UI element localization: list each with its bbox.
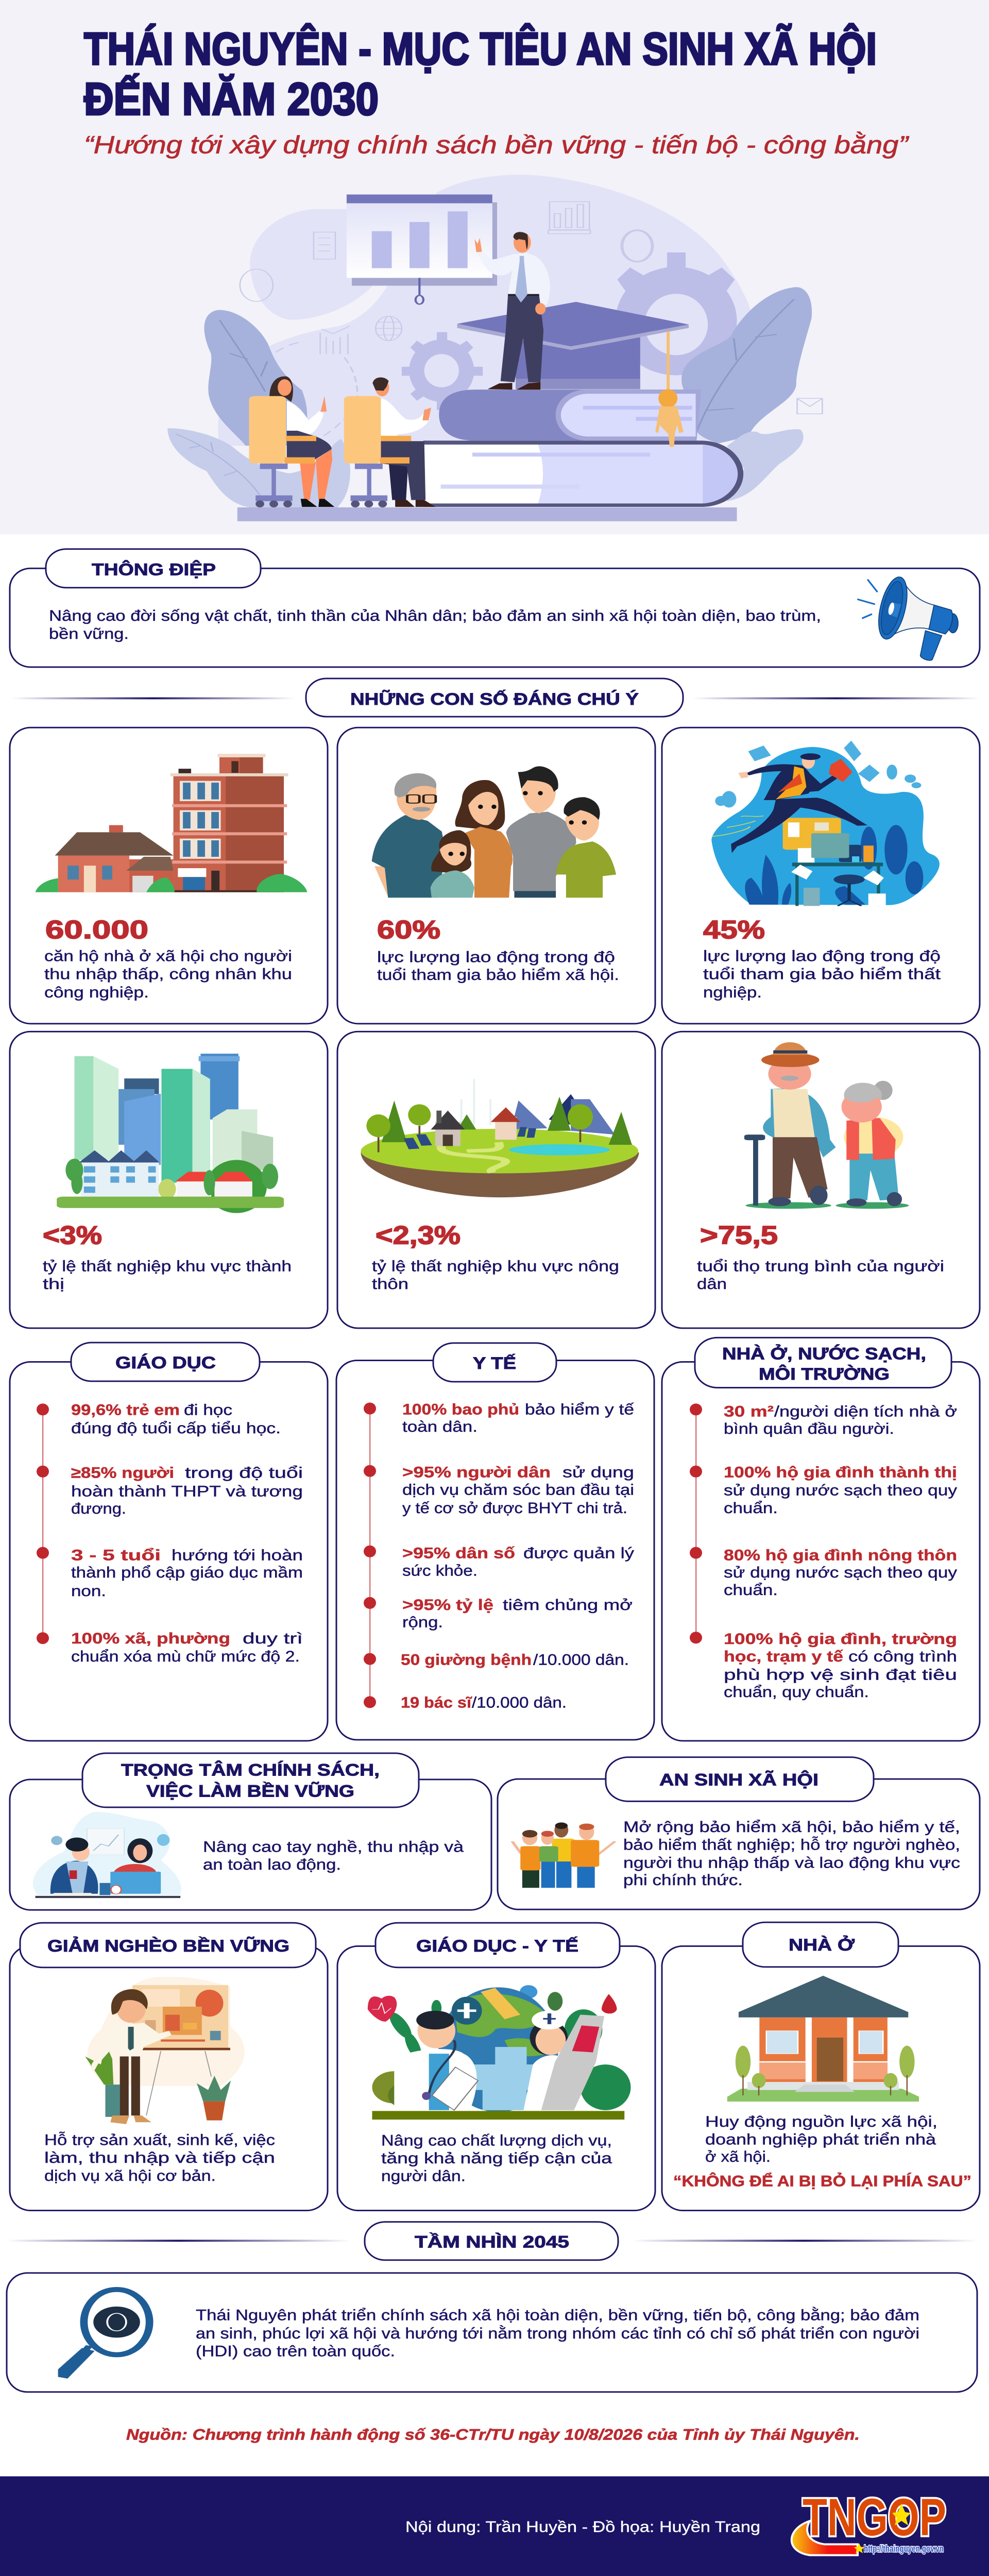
text: y tế items: toàn dân. [402, 1418, 478, 1435]
text: ở xã hội. [705, 2148, 771, 2165]
heading: giảm nghèo bền vững: GIẢM NGHÈO BỀN VỮNG [47, 1937, 289, 1956]
timeline [364, 1402, 376, 1708]
hero illustration [167, 175, 822, 521]
panel: y tế [336, 1343, 654, 1740]
icon: house [727, 1976, 919, 2102]
timeline [690, 1403, 702, 1643]
icon: rural island [361, 1079, 639, 1197]
description: căn hộ nhà ở xã hội cho người [44, 947, 292, 964]
text: (HDI) cao trên toàn quốc. [196, 2343, 395, 2360]
description: tuổi thọ trung bình của người [697, 1258, 944, 1275]
number: 60.000 [45, 915, 148, 944]
text: y tế items: y tế cơ sở được BHYT chi trả. [402, 1500, 627, 1517]
description: dân [697, 1275, 727, 1293]
title: ĐẾN NĂM 2030 [84, 73, 379, 125]
heading: nhà ở: NHÀ Ở [789, 1936, 855, 1955]
text: nhà ở items: chuẩn. [724, 1581, 778, 1599]
description: tỷ lệ thất nghiệp khu vực thành [43, 1258, 292, 1275]
heading: nhà ở, nước sạch, môi trường: NHÀ Ở, NƯỚC SẠCH, [722, 1344, 926, 1363]
text: giáo dục items: 99,6% trẻ em [71, 1401, 180, 1418]
heading: những con số đáng chú ý [11, 679, 980, 717]
description: lực lượng lao động trong độ [377, 948, 615, 965]
text: giáo dục items: duy trì [243, 1630, 303, 1647]
text: y tế items: tiêm chủng mở [503, 1596, 633, 1614]
text: y tế items: 100% bao phủ [402, 1401, 519, 1418]
text [196, 2307, 919, 2360]
number: <3% [43, 1221, 102, 1249]
text: phi chính thức. [623, 1872, 743, 1889]
icon: group of people [512, 1822, 615, 1888]
description: tuổi tham gia bảo hiểm thất [703, 965, 941, 982]
slogan: “KHÔNG ĐỂ AI BỊ BỎ LẠI PHÍA SAU” [673, 2173, 971, 2190]
panel: giáo dục - y tế [337, 1923, 655, 2211]
panel: giáo dục [10, 1343, 328, 1741]
text: y tế items: /10.000 dân. [472, 1694, 567, 1711]
text [203, 1838, 464, 1873]
text: nhà ở items: chuẩn. [724, 1500, 778, 1517]
panel: nhà ở [662, 1922, 980, 2211]
panel: giảm nghèo bền vững [10, 1923, 328, 2211]
title [84, 23, 877, 125]
text: doanh nghiệp phát triển nhà [705, 2131, 936, 2148]
text: nhà ở items: chuẩn, quy chuẩn. [724, 1684, 869, 1701]
text: an sinh, phúc lợi xã hội và hướng tới nằm trong nhóm các tỉnh có chỉ số phát triển con người [196, 2325, 919, 2342]
text: dịch vụ xã hội cơ bản. [44, 2167, 216, 2184]
text: nhà ở items: 100% hộ gia đình, trường [724, 1631, 957, 1648]
seated woman [249, 376, 334, 507]
text: giáo dục items: đi học [184, 1401, 232, 1418]
credits: Nội dung: Trần Huyền - Đồ họa: Huyền Trang [405, 2518, 760, 2535]
heading: nhà ở, nước sạch, môi trường [695, 1337, 951, 1387]
description [43, 1258, 292, 1293]
heading: trọng tâm chính sách [82, 1753, 419, 1807]
heading: giáo dục [71, 1343, 260, 1381]
heading: trọng tâm chính sách: VIỆC LÀM BỀN VỮNG [146, 1782, 354, 1801]
presenter figure [474, 232, 550, 389]
description: công nghiệp. [44, 984, 149, 1001]
panel: stat 60.000 [10, 727, 328, 1024]
leaves [167, 287, 812, 508]
text: y tế items: >95% tỷ lệ [402, 1596, 493, 1614]
gears [402, 252, 737, 410]
footer [0, 2477, 989, 2576]
icon: family [372, 766, 616, 897]
text: bảo hiểm thất nghiệp; hỗ trợ người nghèo, [623, 1836, 960, 1854]
heading: an sinh xã hội [606, 1757, 874, 1801]
description [703, 947, 941, 1001]
icon: office workers [33, 1812, 181, 1898]
text: nhà ở items: 30 m² [724, 1403, 774, 1420]
text: giáo dục items [71, 1401, 303, 1665]
text: y tế items: được quản lý [523, 1545, 635, 1562]
text: nhà ở items: /người diện tích nhà ở [774, 1403, 957, 1420]
number: <2,3% [376, 1221, 461, 1249]
panel: stat >75,5 [662, 1031, 980, 1328]
message text [49, 607, 821, 642]
timeline [37, 1403, 49, 1644]
description [377, 948, 619, 984]
heading: y tế: Y TẾ [473, 1353, 516, 1373]
text: giáo dục items: hoàn thành THPT và tương [71, 1483, 303, 1500]
description [44, 947, 292, 1001]
description: lực lượng lao động trong độ [703, 947, 941, 964]
text: y tế items: >95% người dân [402, 1464, 551, 1481]
text: y tế items: >95% dân số [402, 1545, 515, 1562]
logo: http://thainguyen.gov.vn [864, 2543, 944, 2554]
description: tỷ lệ thất nghiệp khu vực nông [372, 1258, 619, 1275]
text: Thái Nguyên phát triển chính sách xã hội toàn diện, bền vững, tiến bộ, công bằng; bảo đảm [196, 2307, 919, 2324]
panel: thông điệp [10, 549, 980, 667]
text: nhà ở items: có công trình [848, 1648, 957, 1665]
icon: magnifier with eye [58, 2287, 154, 2379]
panel: tầm nhìn [7, 2273, 977, 2392]
description: nghiệp. [703, 984, 762, 1001]
text: Mở rộng bảo hiểm xã hội, bảo hiểm y tế, [623, 1819, 960, 1836]
text: nhà ở items: 100% hộ gia đình thành thị [724, 1464, 957, 1481]
description: thị [43, 1275, 64, 1293]
heading: tầm nhìn 2045 [6, 2222, 977, 2260]
text: nhà ở items: bình quân đầu người. [724, 1420, 894, 1437]
text [381, 2132, 612, 2185]
text: Hỗ trợ sản xuất, sinh kế, việc [44, 2131, 275, 2148]
text: y tế items [401, 1401, 635, 1711]
text: nhà ở items: học, trạm y tế [724, 1648, 843, 1665]
heading: y tế [433, 1343, 556, 1382]
text: giáo dục items: chuẩn xóa mù chữ mức độ 2. [71, 1648, 300, 1665]
panel: stat 60% [337, 727, 655, 1024]
panel: nhà ở, nước sạch, môi trường [662, 1337, 980, 1741]
text: an toàn lao động. [203, 1856, 341, 1873]
text: y tế items: /10.000 dân. [533, 1651, 629, 1668]
text: nhà ở items: sử dụng nước sạch theo quy [724, 1482, 958, 1499]
subtitle: “Hướng tới xây dựng chính sách bền vững - tiến bộ - công bằng” [84, 131, 910, 159]
text: y tế items: rộng. [402, 1614, 443, 1631]
text [44, 2131, 275, 2184]
heading: giáo dục - y tế [376, 1923, 620, 1968]
panel: stat 45% [662, 727, 980, 1024]
text: làm, thu nhập và tiếp cận [44, 2149, 275, 2166]
text: người dân. [381, 2167, 466, 2185]
text: y tế items: sức khỏe. [402, 1562, 478, 1579]
description: thu nhập thấp, công nhân khu [44, 965, 292, 982]
text: y tế items: dịch vụ chăm sóc ban đầu tại [402, 1481, 634, 1498]
description: tuổi tham gia bảo hiểm xã hội. [377, 967, 619, 984]
text: nhà ở items: phù hợp vệ sinh đạt tiêu [724, 1666, 957, 1683]
heading: những con số đáng chú ý: NHỮNG CON SỐ ĐÁNG CHÚ Ý [350, 689, 639, 709]
stack of books [237, 331, 743, 521]
heading: thông điệp: THÔNG ĐIỆP [92, 560, 216, 580]
heading: thông điệp [46, 549, 261, 588]
text: Nâng cao tay nghề, thu nhập và [203, 1838, 464, 1855]
heading: giáo dục - y tế: GIÁO DỤC - Y TẾ [416, 1937, 578, 1956]
text: Nâng cao chất lượng dịch vụ, [381, 2132, 612, 2149]
hero background [0, 0, 989, 534]
text: giáo dục items: non. [71, 1582, 106, 1600]
text: giáo dục items: thành phổ cập giáo dục mầm [71, 1564, 303, 1581]
source note: Nguồn: Chương trình hành động số 36-CTr/TU ngày 10/8/2026 của Tỉnh ủy Thái Nguyên. [126, 2426, 860, 2443]
text: giáo dục items: ≥85% người [71, 1464, 174, 1482]
outline icons [240, 201, 822, 439]
text: y tế items: bảo hiểm y tế [525, 1401, 634, 1418]
text: tăng khả năng tiếp cận của [381, 2150, 612, 2167]
text: y tế items: 50 giường bệnh [401, 1651, 532, 1668]
icon: city [57, 1054, 284, 1213]
text: y tế items: 19 bác sĩ [401, 1694, 473, 1711]
logo [792, 2488, 946, 2555]
heading: nhà ở [743, 1922, 898, 1967]
number: 60% [377, 915, 440, 944]
text: giáo dục items: 100% xã, phường [71, 1630, 230, 1647]
text: nhà ở items [724, 1403, 958, 1701]
text [623, 1819, 960, 1889]
panel: stat <2,3% [337, 1031, 655, 1328]
number: >75,5 [700, 1221, 778, 1249]
text: nhà ở items: sử dụng nước sạch theo quy [724, 1564, 958, 1581]
text [705, 2113, 937, 2165]
text: giáo dục items: đúng độ tuổi cấp tiểu học. [71, 1420, 281, 1437]
heading: giáo dục: GIÁO DỤC [115, 1353, 216, 1372]
icon: elderly couple [744, 1042, 909, 1209]
panel: stat <3% [10, 1031, 328, 1328]
icon: houses [36, 754, 307, 892]
panel: trọng tâm chính sách [10, 1753, 491, 1910]
description [372, 1258, 619, 1293]
text: giáo dục items: 3 - 5 tuổi [71, 1547, 161, 1564]
text: người thu nhập thấp và lao động khu vực [623, 1854, 960, 1871]
text: giáo dục items: hướng tới hoàn [172, 1547, 303, 1564]
heading: tầm nhìn 2045: TẦM NHÌN 2045 [415, 2232, 569, 2252]
text: nhà ở items: 80% hộ gia đình nông thôn [724, 1547, 957, 1564]
heading: an sinh xã hội: AN SINH XÃ HỘI [659, 1770, 819, 1789]
panel: an sinh xã hội [498, 1757, 980, 1909]
heading: giảm nghèo bền vững [20, 1923, 316, 1968]
message text: Nâng cao đời sống vật chất, tinh thần của Nhân dân; bảo đảm an sinh xã hội toàn diện, bao trùm, [49, 607, 821, 624]
graduation cap [457, 302, 689, 389]
icon: medical staff and globe [368, 1985, 630, 2120]
text: giáo dục items: đương. [71, 1500, 126, 1517]
text: giáo dục items: trong độ tuổi [185, 1464, 303, 1482]
heading: nhà ở, nước sạch, môi trường: MÔI TRƯỜNG [759, 1364, 890, 1384]
number: 45% [703, 915, 765, 944]
seated man [344, 377, 435, 507]
text: Huy động nguồn lực xã hội, [705, 2113, 937, 2130]
heading: trọng tâm chính sách: TRỌNG TÂM CHÍNH SÁCH, [121, 1760, 380, 1780]
text: y tế items: sử dụng [562, 1464, 634, 1481]
icon: megaphone [858, 574, 958, 660]
description [697, 1258, 944, 1293]
description: thôn [372, 1275, 408, 1293]
message text: bền vững. [49, 625, 129, 642]
icon: presenter with board [85, 1977, 245, 2124]
presentation board [347, 195, 497, 304]
icon: jumping worker [711, 741, 940, 906]
